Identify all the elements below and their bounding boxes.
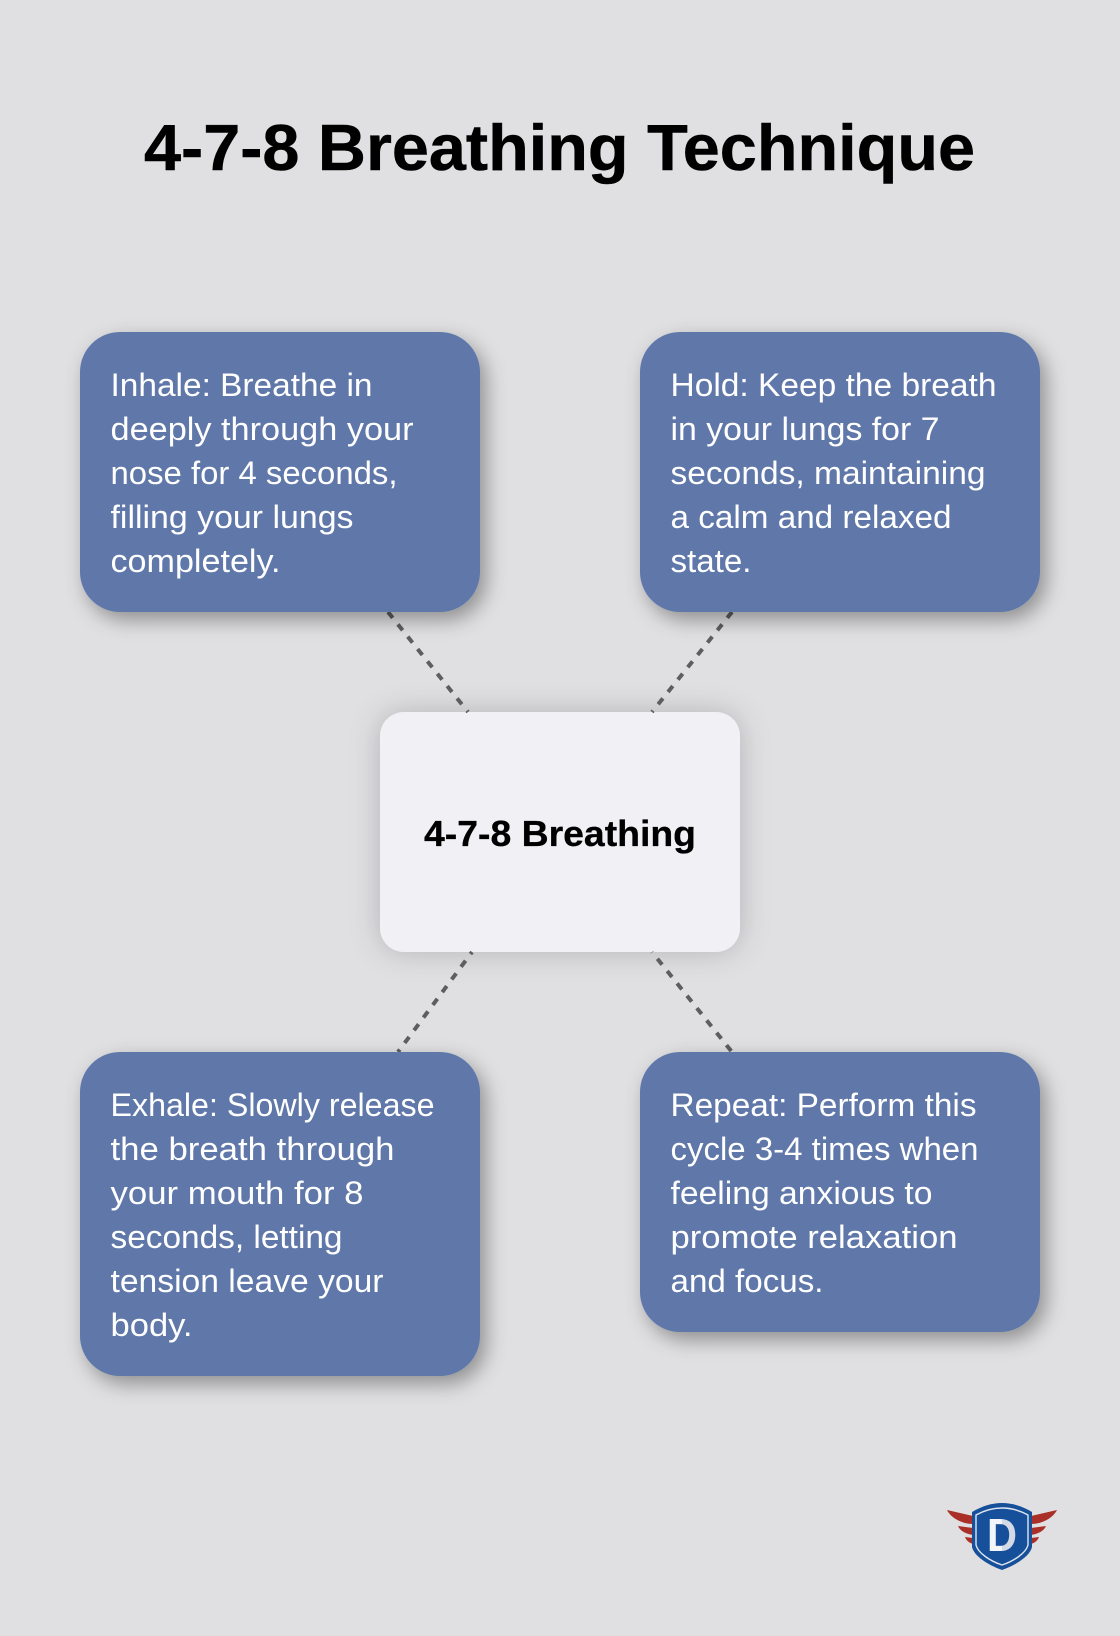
exhale text: seconds, letting <box>110 1219 342 1255</box>
inhale text: deeply through your <box>110 411 414 447</box>
inhale text <box>110 367 414 579</box>
hold text: in your lungs for 7 <box>670 411 940 447</box>
exhale text: Exhale: Slowly release <box>110 1087 434 1123</box>
exhale text <box>110 1087 434 1343</box>
repeat text: promote relaxation <box>670 1219 958 1255</box>
exhale text: tension leave your <box>110 1263 384 1299</box>
panel: hold <box>640 332 1040 612</box>
exhale text: the breath through <box>110 1131 394 1167</box>
inhale text: Inhale: Breathe in <box>110 367 372 403</box>
repeat text: Repeat: Perform this <box>670 1087 976 1123</box>
icon: winged shield logo <box>947 1503 1057 1570</box>
hold text <box>670 367 996 579</box>
hold text: state. <box>670 543 752 579</box>
repeat text: cycle 3-4 times when <box>670 1131 978 1167</box>
icon: winged shield logo: D <box>987 1509 1017 1561</box>
repeat text <box>670 1087 978 1299</box>
title: 4-7-8 Breathing Technique <box>144 111 975 184</box>
panel: repeat <box>640 1052 1040 1332</box>
panel: exhale <box>80 1052 480 1376</box>
center label: 4-7-8 Breathing <box>424 813 696 854</box>
hold text: seconds, maintaining <box>670 455 986 491</box>
panel: inhale <box>80 332 480 612</box>
inhale text: completely. <box>110 543 280 579</box>
panel: center node <box>380 712 740 952</box>
repeat text: feeling anxious to <box>670 1175 932 1211</box>
hold text: Hold: Keep the breath <box>670 367 996 403</box>
exhale text: your mouth for 8 <box>110 1175 364 1211</box>
exhale text: body. <box>110 1307 192 1343</box>
repeat text: and focus. <box>670 1263 824 1299</box>
inhale text: filling your lungs <box>110 499 354 535</box>
hold text: a calm and relaxed <box>670 499 952 535</box>
dashed connectors <box>388 612 732 1052</box>
inhale text: nose for 4 seconds, <box>110 455 398 491</box>
